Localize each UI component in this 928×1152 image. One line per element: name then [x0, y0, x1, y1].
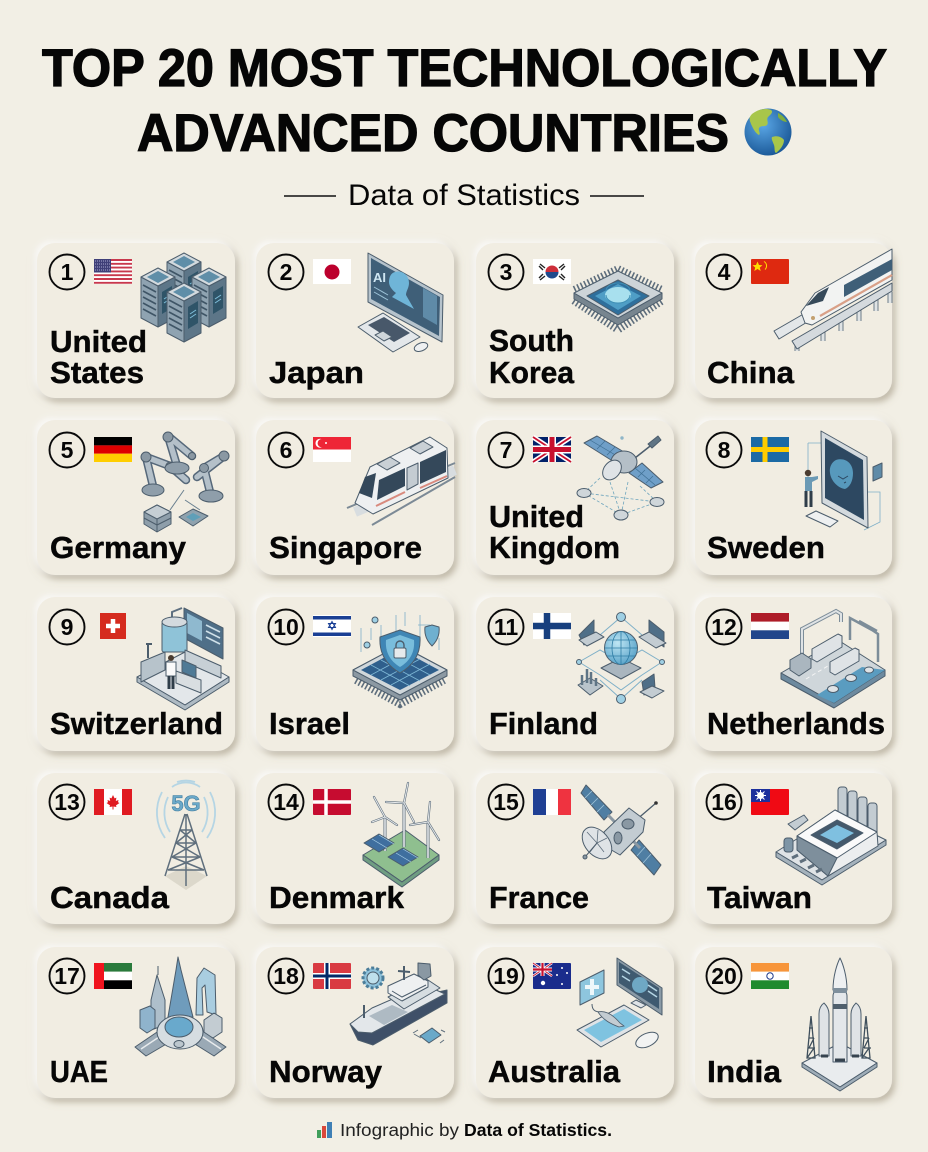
country name: India [707, 1054, 782, 1089]
icon: medical technology [577, 958, 662, 1051]
rank number 11: 11 [494, 614, 518, 640]
country name: Japan [269, 355, 364, 390]
rank number 4 [706, 254, 742, 290]
flag: United Kingdom [533, 437, 571, 462]
icon: satellite [576, 785, 661, 875]
card 17: UAE [37, 947, 235, 1098]
icon: smart port [781, 611, 885, 708]
card 2: Japan [256, 243, 454, 398]
country name: United [489, 499, 584, 534]
country name: Finland [489, 706, 598, 741]
country name: France [489, 880, 589, 915]
title: TOP 20 MOST TECHNOLOGICALLY [42, 39, 887, 98]
country name: Switzerland [50, 706, 223, 741]
rank number 1 [50, 254, 84, 290]
country name: Germany [50, 530, 187, 565]
country name: Taiwan [707, 880, 812, 915]
rank number 16 [706, 784, 742, 820]
footer credit [317, 1120, 612, 1140]
rank number 16: 16 [711, 789, 737, 815]
country name: States [50, 355, 144, 390]
flag: China [751, 259, 789, 284]
icon: microchip [574, 268, 662, 329]
card 15: France [476, 773, 674, 924]
card 20: India [695, 947, 892, 1098]
card 3: South Korea [476, 243, 674, 398]
card 6: Singapore [256, 420, 455, 575]
rank number 9: 9 [61, 614, 73, 640]
country name [489, 499, 620, 565]
country name: United [50, 324, 147, 359]
card 9: Switzerland [37, 597, 235, 751]
flag: Japan [313, 259, 351, 284]
rank number 18 [268, 958, 304, 994]
rank number 12: 12 [711, 614, 737, 640]
rank number 7: 7 [500, 437, 512, 463]
country name: Australia [488, 1054, 621, 1089]
rank number 3 [488, 254, 524, 290]
rank number 15 [488, 784, 524, 820]
flag: Sweden [751, 437, 789, 462]
flag: Netherlands [751, 613, 789, 639]
icon: biometric scanner [805, 431, 882, 530]
country name: Denmark [269, 880, 405, 915]
card 5: Germany [37, 420, 235, 575]
rank number 9 [50, 610, 84, 644]
country name: Singapore [269, 530, 422, 565]
flag: Germany [94, 437, 132, 462]
rank number 14: 14 [273, 789, 299, 815]
footer credit: Infographic by [340, 1120, 459, 1140]
icon: bullet train [774, 249, 892, 351]
rank number 17: 17 [54, 963, 80, 989]
icon: research lab [137, 608, 229, 710]
flag: India [751, 963, 789, 989]
subtitle: Data of Statistics [348, 179, 580, 212]
flag: Switzerland [100, 613, 126, 639]
card 13: Canada [37, 773, 235, 924]
rank number 5: 5 [61, 437, 74, 463]
rank number 14 [268, 784, 304, 820]
icon: bar chart [317, 1122, 332, 1138]
flag: Denmark [313, 789, 351, 815]
card 11: Finland [476, 597, 674, 751]
rank number 11 [488, 610, 524, 644]
rank number 10: 10 [273, 614, 299, 640]
icon: robot arms [141, 432, 229, 532]
country name: Kingdom [489, 530, 620, 565]
rank number 12 [706, 610, 742, 644]
card 18: Norway [256, 947, 454, 1098]
icon: wind and solar farm [363, 783, 439, 887]
icon: globe [744, 108, 792, 156]
flag: UAE [94, 963, 132, 989]
icon: satellite network [577, 436, 664, 520]
country name: South [489, 323, 574, 358]
card 12: Netherlands [695, 597, 892, 751]
rank number 13 [50, 784, 84, 820]
icon: smart ship [350, 963, 447, 1045]
footer credit: Data of Statistics. [464, 1120, 612, 1140]
icon: metro train [347, 437, 455, 525]
country name: Netherlands [707, 706, 885, 741]
card 19: Australia [476, 947, 674, 1098]
flag: United States [94, 259, 132, 284]
rank number 6: 6 [280, 437, 292, 463]
rank number 20: 20 [711, 963, 737, 989]
icon: AI computer: AI [373, 270, 386, 285]
card 16: Taiwan [695, 773, 892, 924]
icon: global network [576, 612, 666, 704]
rank number 4: 4 [718, 259, 731, 285]
rank number 19: 19 [493, 963, 519, 989]
rank number 6 [268, 432, 304, 468]
flag: Finland [533, 613, 571, 639]
country name: Sweden [707, 530, 825, 565]
icon: AI computer [358, 253, 443, 353]
rank number 3: 3 [500, 259, 512, 285]
rank number 1: 1 [61, 259, 74, 285]
card 7: United Kingdom [476, 420, 674, 575]
flag: Israel [313, 615, 351, 637]
card 4: China [695, 243, 892, 398]
rank number 17 [50, 958, 84, 994]
icon: semiconductor fab [776, 787, 886, 885]
card 8: Sweden [695, 420, 892, 575]
icon: cyber security chip [353, 612, 447, 704]
rank number 13: 13 [54, 789, 80, 815]
title: ADVANCED COUNTRIES [137, 104, 729, 163]
flag: Australia [533, 963, 571, 989]
flag: Singapore [313, 437, 351, 462]
icon: futuristic city [135, 957, 226, 1056]
rank number 2: 2 [280, 259, 292, 285]
country name: Canada [50, 880, 170, 915]
rank number 5 [50, 432, 84, 468]
rank number 8: 8 [718, 437, 731, 463]
rank number 2 [268, 254, 304, 290]
icon: 5G tower: 5G [171, 791, 201, 816]
rank number 15: 15 [493, 789, 519, 815]
country name: Norway [269, 1054, 383, 1089]
country name [489, 323, 575, 390]
icon: rocket on launch pad [802, 958, 877, 1091]
rank number 19 [488, 958, 524, 994]
country name: Israel [269, 706, 350, 741]
icon: 5G tower [157, 781, 215, 890]
rank number 8 [706, 432, 742, 468]
country name [50, 324, 147, 390]
country name: Korea [489, 355, 575, 390]
icon: data center servers [141, 253, 226, 342]
flag: Taiwan [751, 789, 789, 815]
card 14: Denmark [256, 773, 454, 924]
country name: China [707, 355, 795, 390]
rank number 7 [488, 432, 524, 468]
flag: France [533, 789, 571, 815]
flag: South Korea [533, 259, 571, 284]
title [42, 39, 887, 163]
rank number 20 [706, 958, 742, 994]
country name: UAE [50, 1054, 108, 1089]
rank number 18: 18 [273, 963, 299, 989]
flag: Norway [313, 963, 351, 989]
card 1: United States [37, 243, 235, 398]
card 10: Israel [256, 597, 454, 751]
rank number 10 [268, 610, 304, 644]
flag: Canada [94, 789, 132, 815]
